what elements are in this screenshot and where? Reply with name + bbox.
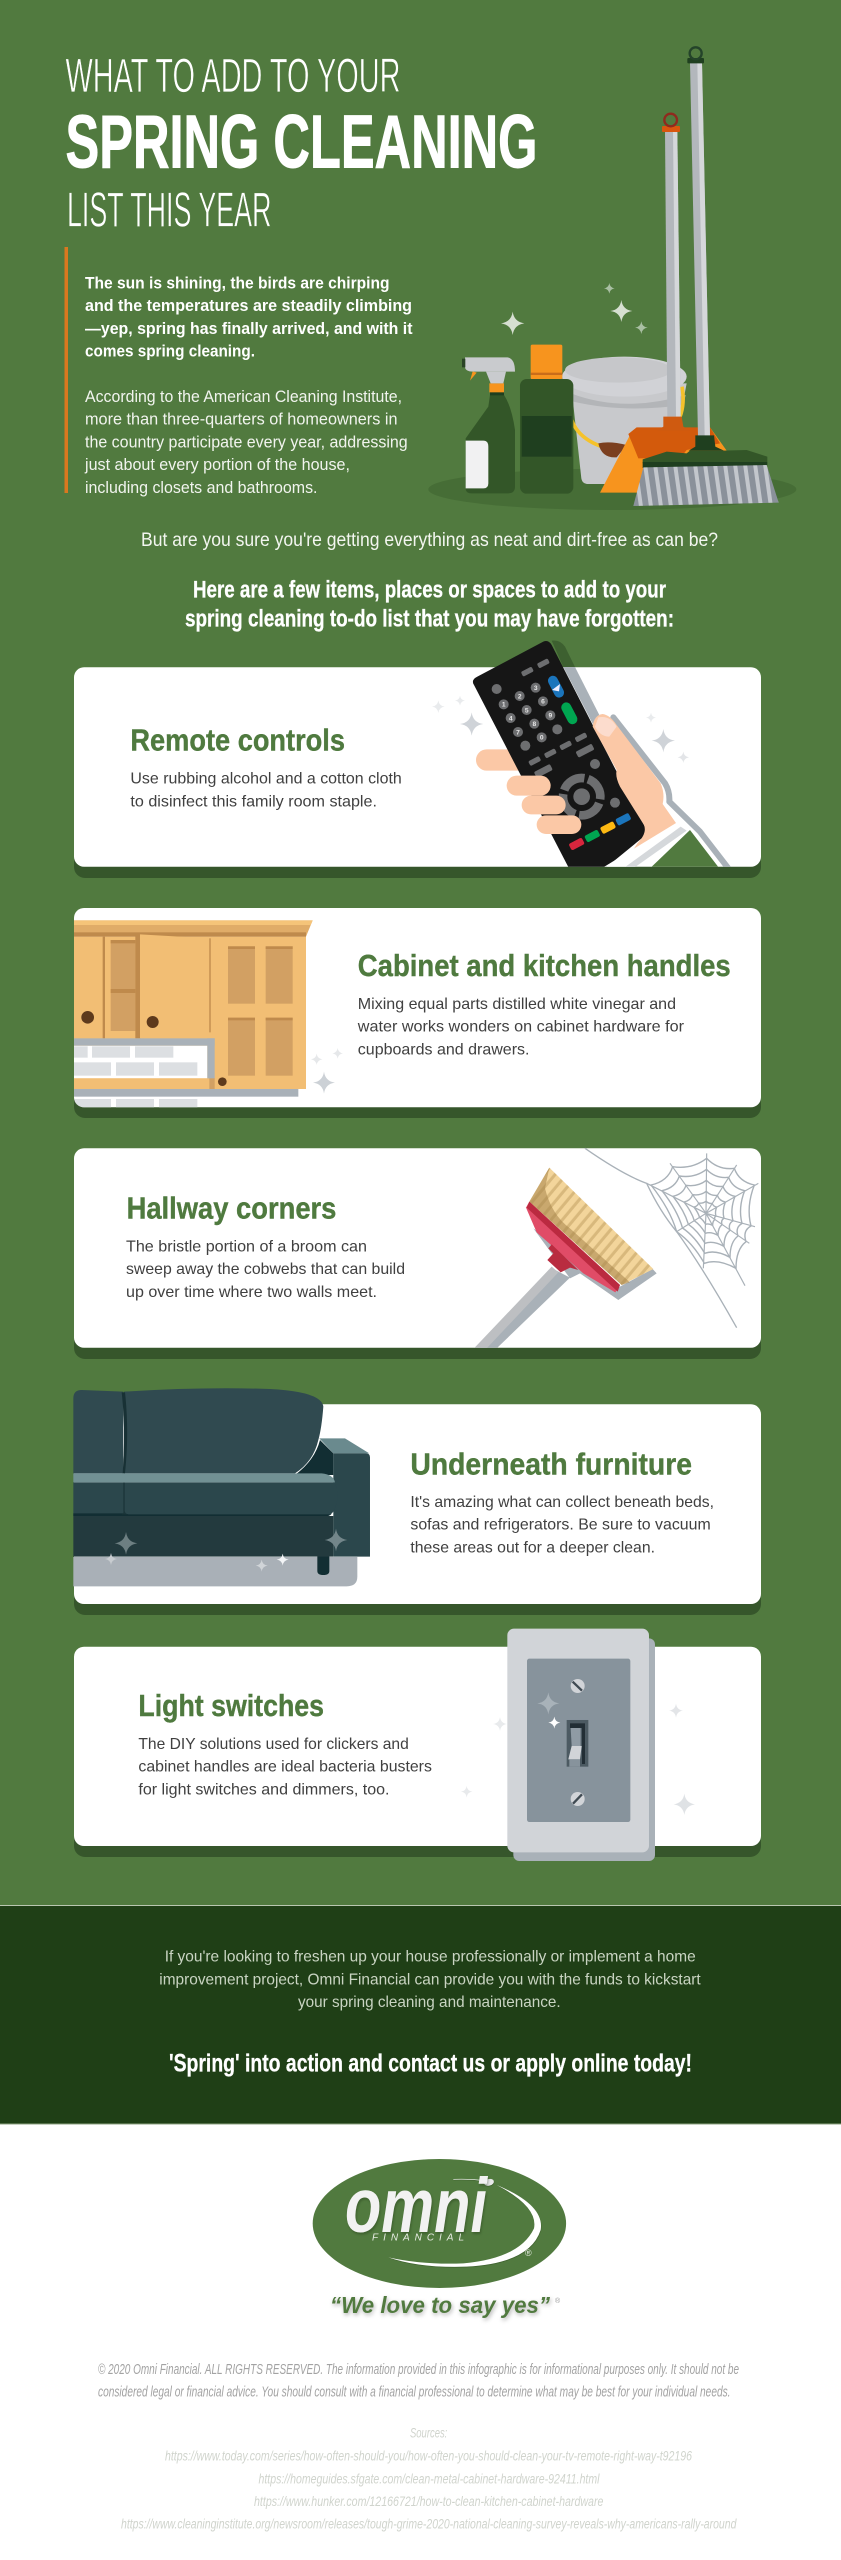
intro bold paragraph: —yep, spring has finally arrived, and with it [85, 319, 413, 338]
icon: hand holding remote: 0 [540, 735, 544, 742]
icon: cobweb [585, 1148, 758, 1328]
bottle [520, 345, 573, 494]
sources: Sources: [410, 2425, 447, 2440]
title: SPRING CLEANING [66, 100, 538, 184]
body text: The bristle portion of a broom can [126, 1238, 367, 1255]
body text [410, 1494, 714, 1556]
title: WHAT TO ADD TO YOUR [66, 50, 400, 103]
short dustpan handle [662, 114, 681, 417]
intro regular paragraph [84, 387, 408, 497]
panel: underneath furniture [73, 1388, 761, 1615]
sources: https://homeguides.sfgate.com/clean-metal-cabinet-hardware-92411.html [258, 2471, 600, 2486]
broom [633, 47, 779, 506]
section heading: spring cleaning to-do list that you may have forgotten: [185, 605, 674, 632]
intro bold paragraph: and the temperatures are steadily climbing [85, 296, 412, 315]
icon: hand holding remote: 4 [509, 715, 513, 722]
logo: Omni Financial: ® [555, 2297, 561, 2305]
body text: Mixing equal parts distilled white vinegar and [358, 996, 676, 1013]
sources [121, 2425, 737, 2532]
card background [74, 908, 761, 1118]
heading: Light switches [138, 1688, 324, 1723]
dustpan [600, 417, 727, 493]
intro regular paragraph: the country participate every year, addressing [85, 432, 408, 451]
body text: It's amazing what can collect beneath beds, [410, 1494, 714, 1511]
illustration: cleaning supplies [428, 47, 796, 510]
call to action text [159, 1949, 701, 2011]
footer background [0, 2124, 841, 2560]
icon: hand holding remote: 7 [516, 729, 520, 736]
intro bold paragraph: The sun is shining, the birds are chirping [85, 273, 390, 292]
intro accent bar [64, 247, 68, 493]
body text: cabinet handles are ideal bacteria busters [138, 1759, 432, 1776]
icon: broom [474, 1168, 657, 1348]
bucket [562, 357, 687, 484]
title: LIST THIS YEAR [67, 183, 272, 237]
sources: https://www.hunker.com/12166721/how-to-clean-kitchen-cabinet-hardware [254, 2494, 603, 2509]
intro bold paragraph [85, 273, 413, 360]
spray bottle [462, 357, 515, 493]
sparkles [501, 283, 648, 335]
heading: Cabinet and kitchen handles [358, 948, 731, 983]
body text: these areas out for a deeper clean. [410, 1539, 655, 1556]
call to action heading: 'Spring' into action and contact us or apply online today! [169, 2050, 692, 2078]
title [66, 50, 538, 237]
body text [357, 996, 684, 1058]
logo: Omni Financial [313, 2159, 566, 2318]
body text: to disinfect this family room staple. [130, 793, 377, 810]
panel: cabinet and kitchen handles [70, 908, 761, 1118]
body text: The DIY solutions used for clickers and [138, 1736, 409, 1753]
card background [74, 1647, 761, 1857]
call to action text: your spring cleaning and maintenance. [298, 1994, 561, 2011]
call to action text: If you're looking to freshen up your house professionally or implement a home [165, 1949, 696, 1966]
body text [138, 1736, 432, 1798]
body text: sofas and refrigerators. Be sure to vacuum [410, 1517, 711, 1534]
body text: up over time where two walls meet. [126, 1284, 377, 1301]
icon: sofa [73, 1388, 370, 1586]
body text: cupboards and drawers. [358, 1041, 530, 1058]
swoosh [388, 2178, 541, 2267]
icon: hand holding remote: 3 [534, 685, 538, 692]
section heading: Here are a few items, places or spaces to add to your [193, 577, 666, 604]
card background [74, 667, 761, 878]
icon: hand holding remote: 2 [518, 693, 522, 700]
card background [74, 1148, 761, 1359]
panel: light switches [74, 1629, 761, 1861]
icon: hand holding remote: 9 [548, 713, 552, 720]
icon: hand holding remote: 1 [502, 702, 506, 709]
panel: hallway corners [74, 1148, 761, 1359]
body text: water works wonders on cabinet hardware for [357, 1019, 684, 1036]
panel: remote controls [74, 640, 761, 878]
icon: hand holding remote: 5 [525, 707, 529, 714]
ground shadow [428, 469, 796, 510]
wordmark: omni [345, 2163, 488, 2249]
call to action band [0, 1905, 841, 2124]
body text [126, 1238, 405, 1301]
body text: for light switches and dimmers, too. [138, 1781, 390, 1798]
card background [74, 1404, 761, 1615]
body text: Use rubbing alcohol and a cotton cloth [130, 771, 402, 788]
icon: hand holding remote: 6 [541, 699, 545, 706]
call to action text: improvement project, Omni Financial can provide you with the funds to kickstart [159, 1971, 701, 1988]
icon: hand holding remote [432, 640, 728, 868]
registered mark: ® [525, 2248, 532, 2258]
body text: sweep away the cobwebs that can build [126, 1261, 405, 1278]
heading: Remote controls [130, 723, 345, 758]
icon: light switch [461, 1629, 695, 1861]
body text [130, 771, 402, 810]
icon: kitchen cabinets [70, 920, 343, 1108]
heading: Hallway corners [127, 1191, 336, 1226]
intro regular paragraph: According to the American Cleaning Institute, [85, 387, 402, 406]
intro regular paragraph: including closets and bathrooms. [85, 478, 318, 497]
financial label: FINANCIAL [372, 2232, 464, 2244]
intro regular paragraph: more than three-quarters of homeowners in [85, 410, 398, 429]
sources: https://www.today.com/series/how-often-should-you/how-often-you-should-clean-your-tv-remote-right-way-t92196 [165, 2449, 692, 2464]
intro regular paragraph: just about every portion of the house, [84, 455, 350, 474]
heading: Underneath furniture [410, 1446, 692, 1481]
disclaimer [98, 2361, 739, 2401]
question line: But are you sure you're getting everything as neat and dirt-free as can be? [141, 529, 718, 551]
intro bold paragraph: comes spring cleaning. [85, 342, 255, 360]
section heading [185, 577, 674, 632]
icon: hand holding remote: 8 [532, 721, 536, 728]
tagline: “We love to say yes” [330, 2292, 550, 2318]
